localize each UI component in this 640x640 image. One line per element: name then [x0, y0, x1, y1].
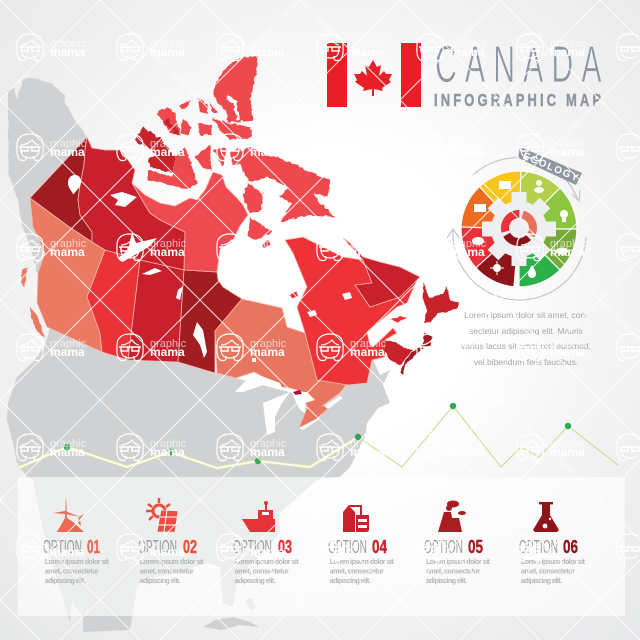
watermark: diagonal grid and graphic mama logos: graphic	[50, 338, 87, 350]
watermark: diagonal grid and graphic mama logos: mama	[550, 345, 585, 359]
watermark: diagonal grid and graphic mama logos: mama	[550, 245, 585, 259]
watermark: diagonal grid and graphic mama logos: graphic	[450, 438, 487, 450]
watermark: diagonal grid and graphic mama logos: mama	[150, 45, 185, 59]
watermark: diagonal grid and graphic mama logos: graphic	[350, 238, 387, 250]
map: Atlantic provinces	[262, 240, 459, 375]
segment icons	[472, 180, 568, 278]
province: Quebec	[285, 237, 417, 385]
option 03: Lorem ipsum dolor sit	[235, 559, 299, 566]
watermark: diagonal grid and graphic mama logos: graphic	[250, 38, 287, 50]
watermark: diagonal grid and graphic mama logos: graphic	[150, 338, 187, 350]
gear segments	[448, 159, 589, 299]
option 04	[328, 505, 394, 585]
watermark: diagonal grid and graphic mama logos: graphic	[350, 38, 387, 50]
option 06: amet, consectetur	[521, 568, 575, 576]
watermark: diagonal grid and graphic mama logos: graphic	[250, 338, 287, 350]
option 02: adipiscing elit.	[140, 578, 181, 585]
watermark: diagonal grid and graphic mama logos: mama	[450, 145, 485, 159]
option 02: amet, consectetur	[140, 568, 194, 576]
watermark: diagonal grid and graphic mama logos: mama	[250, 345, 285, 359]
watermark: diagonal grid and graphic mama logos: graphic	[350, 438, 387, 450]
option 01: amet, consectetur	[45, 568, 99, 576]
watermark: diagonal grid and graphic mama logos: graphic	[150, 238, 187, 250]
watermark: diagonal grid and graphic mama logos: graphic	[250, 238, 287, 250]
icon: ship	[242, 501, 275, 532]
icon: flask	[533, 502, 559, 532]
watermark: diagonal grid and graphic mama logos: mama	[50, 545, 85, 559]
option 05: Lorem ipsum dolor sit	[426, 559, 491, 566]
island: Victoria	[148, 147, 197, 190]
island: Anticosti	[390, 316, 407, 322]
option 05: adipiscing elit.	[426, 578, 467, 585]
watermark: diagonal grid and graphic mama logos: mama	[550, 445, 585, 459]
option 06	[519, 502, 586, 585]
ecology gear diagram	[447, 147, 589, 300]
watermark: diagonal grid and graphic mama logos: graphic	[150, 138, 187, 150]
option 02	[138, 498, 204, 585]
option 03	[233, 501, 299, 585]
paragraph: lorem ipsum: sectetur adipiscing elit. Mauris	[469, 326, 583, 336]
option 01	[43, 496, 109, 585]
chart data points	[64, 403, 571, 464]
option 06: OPTION	[519, 537, 558, 557]
ecology ribbon: ECOLOGY	[521, 151, 581, 185]
province: Ontario	[215, 299, 348, 428]
watermark: diagonal grid and graphic mama logos: mama	[450, 245, 485, 259]
option 03: adipiscing elit.	[235, 578, 276, 585]
option 06: Lorem ipsum dolor sit	[521, 559, 586, 566]
option 02: 02	[183, 537, 197, 557]
watermark: diagonal grid and graphic mama logos: mama	[350, 145, 385, 159]
watermark: diagonal grid and graphic mama logos: graphic	[50, 138, 87, 150]
province: British Columbia	[30, 198, 105, 352]
paragraph: lorem ipsum: Lorem ipsum dolor sit amet, con-	[464, 310, 588, 320]
watermark: diagonal grid and graphic mama logos: graphic	[350, 138, 387, 150]
option 06: adipiscing elit.	[521, 578, 562, 585]
gear body	[482, 192, 556, 266]
paragraph: lorem ipsum: varius lacus sit amet orci euismod,	[461, 341, 591, 351]
option 04: adipiscing elit.	[330, 578, 371, 585]
watermark: diagonal grid and graphic mama logos: mama	[550, 145, 585, 159]
option 05: OPTION	[424, 537, 463, 557]
watermark: diagonal grid and graphic mama logos: mama	[250, 445, 285, 459]
option 05	[424, 500, 491, 585]
map: grey United States and Mexico	[7, 328, 390, 632]
watermark: diagonal grid and graphic mama logos: mama	[50, 145, 85, 159]
option 05: amet, consectetur	[426, 568, 480, 576]
watermark: diagonal grid and graphic mama logos: mama	[50, 345, 85, 359]
watermark: diagonal grid and graphic mama logos: mama	[450, 45, 485, 59]
island: Ellesmere	[213, 57, 257, 122]
watermark: diagonal grid and graphic mama logos: mama	[50, 45, 85, 59]
cycle arrows	[447, 158, 586, 300]
island: Southampton	[248, 217, 273, 240]
option 02: OPTION	[138, 537, 177, 557]
watermark: diagonal grid and graphic mama logos: mama	[150, 345, 185, 359]
option 03: amet, consectetur	[235, 568, 289, 576]
option 03: 03	[278, 537, 292, 557]
option 04: 04	[372, 537, 387, 557]
watermark: diagonal grid and graphic mama logos: graphic	[250, 438, 287, 450]
watermark: diagonal grid and graphic mama logos: mama	[450, 345, 485, 359]
icon: factory	[438, 500, 466, 532]
map: Canadian provinces	[30, 137, 420, 428]
option 01: OPTION	[43, 537, 82, 557]
watermark: diagonal grid and graphic mama logos: graphic	[50, 238, 87, 250]
map: grey Alaska	[8, 77, 87, 275]
watermark: diagonal grid and graphic mama logos: mama	[450, 445, 485, 459]
watermark: diagonal grid and graphic mama logos: graphic	[550, 238, 587, 250]
option 03: OPTION	[233, 537, 272, 557]
paragraph: lorem ipsum	[461, 310, 591, 367]
subtitle: INFOGRAPHIC MAP: INFOGRAPHIC MAP	[434, 91, 601, 111]
watermark: diagonal grid and graphic mama logos: mama	[350, 445, 385, 459]
province: Saskatchewan	[128, 260, 184, 362]
option 04: Lorem ipsum dolor sit	[330, 559, 394, 566]
title: flag of Canada	[327, 43, 421, 107]
watermark: diagonal grid and graphic mama logos: graphic	[150, 38, 187, 50]
watermark: diagonal grid and graphic mama logos: mama	[150, 545, 185, 559]
islands: James Bay	[290, 291, 298, 299]
province: Manitoba	[178, 270, 242, 373]
title: CANADA: CANADA	[435, 37, 602, 94]
watermark: diagonal grid and graphic mama logos: graphic	[350, 338, 387, 350]
province: New Brunswick	[385, 340, 413, 365]
map: Pacific islands	[21, 268, 45, 338]
island: Banks	[135, 127, 175, 173]
province: Labrador	[343, 238, 420, 307]
province: Alberta	[87, 250, 140, 360]
watermark: diagonal grid and graphic mama logos: mama	[150, 245, 185, 259]
province: Newfoundland	[423, 282, 459, 323]
watermark: diagonal grid and graphic mama logos: graphic	[450, 138, 487, 150]
watermark: diagonal grid and graphic mama logos: graphic	[450, 338, 487, 350]
watermark: diagonal grid and graphic mama logos: graphic	[150, 438, 187, 450]
option 02: Lorem ipsum dolor sit	[140, 559, 204, 566]
watermark: diagonal grid and graphic mama logos: mama	[350, 345, 385, 359]
option 06: 06	[563, 537, 578, 557]
map: lakes and inland water	[110, 192, 352, 435]
watermark: diagonal grid and graphic mama logos: graphic	[550, 138, 587, 150]
watermark: diagonal grid and graphic mama logos: mama	[350, 245, 385, 259]
option 01: Lorem ipsum dolor sit	[45, 559, 109, 566]
watermark: diagonal grid and graphic mama logos: mama	[150, 145, 185, 159]
icon: solar panel	[146, 498, 178, 532]
watermark: diagonal grid and graphic mama logos: graphic	[550, 338, 587, 350]
icon: location pin	[68, 175, 81, 194]
options panel background	[18, 477, 625, 616]
watermark: diagonal grid and graphic mama logos: mama	[550, 45, 585, 59]
option 04: OPTION	[328, 537, 367, 557]
province: Nunavut mainland	[132, 172, 248, 272]
option 01: 01	[87, 537, 100, 557]
option 04: amet, consectetur	[330, 568, 384, 576]
watermark: diagonal grid and graphic mama logos: mama	[250, 245, 285, 259]
watermark: diagonal grid and graphic mama logos: mama	[50, 245, 85, 259]
map: Arctic islands	[135, 57, 335, 240]
province: Northwest Territories	[78, 137, 185, 270]
watermark: diagonal grid and graphic mama logos: mama	[250, 45, 285, 59]
watermark: diagonal grid and graphic mama logos: mama	[350, 45, 385, 59]
watermark: diagonal grid and graphic mama logos: mama	[250, 145, 285, 159]
watermark: diagonal grid and graphic mama logos: graphic	[450, 238, 487, 250]
watermark: diagonal grid and graphic mama logos: mama	[150, 445, 185, 459]
province: Nova Scotia	[400, 333, 432, 375]
icon: wind turbine	[53, 496, 84, 532]
province: Yukon	[30, 137, 92, 242]
watermark: diagonal grid and graphic mama logos: graphic	[50, 38, 87, 50]
line chart	[18, 403, 618, 468]
island: Baffin	[237, 147, 335, 222]
paragraph: lorem ipsum: vel bibendum felis faucibus.	[474, 357, 578, 367]
watermark: diagonal grid and graphic mama logos: graphic	[550, 38, 587, 50]
watermark: diagonal grid and graphic mama logos: graphic	[550, 438, 587, 450]
option 01: adipiscing elit.	[45, 578, 86, 585]
watermark: diagonal grid and graphic mama logos: graphic	[450, 38, 487, 50]
icon: storage tank	[343, 505, 369, 532]
watermark: diagonal grid and graphic mama logos: mama	[50, 445, 85, 459]
watermark: diagonal grid and graphic mama logos: mama	[250, 545, 285, 559]
watermark: diagonal grid and graphic mama logos: graphic	[50, 438, 87, 450]
centre ring	[499, 208, 539, 248]
option 05: 05	[468, 537, 483, 557]
watermark: diagonal grid and graphic mama logos: graphic	[250, 138, 287, 150]
